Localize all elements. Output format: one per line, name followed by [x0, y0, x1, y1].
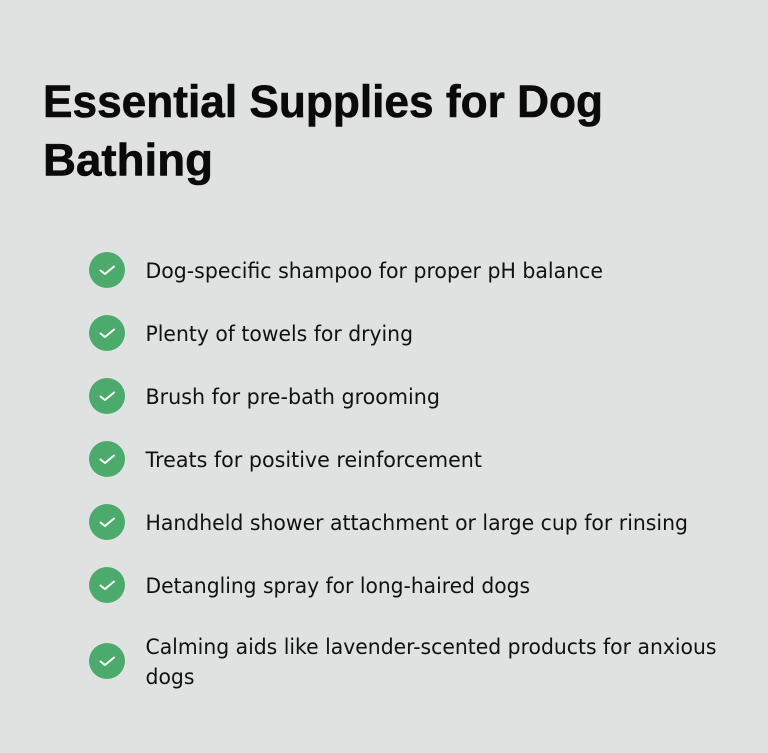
item: detangling spray: Detangling spray for long-haired dogs [146, 574, 530, 599]
title [43, 76, 603, 186]
item: brush [89, 378, 440, 414]
item: shampoo: Dog-specific shampoo for proper pH balance [146, 259, 603, 284]
checklist [89, 252, 716, 690]
item: towels [89, 315, 413, 351]
item: calming aids [89, 635, 716, 690]
item: detangling spray [89, 567, 530, 603]
title: Essential Supplies for Dog [43, 76, 603, 127]
item: shower attachment [89, 504, 688, 540]
item: shampoo [89, 252, 603, 288]
item: brush: Brush for pre-bath grooming [146, 385, 440, 410]
item: shower attachment: Handheld shower attachment or large cup for rinsing [146, 511, 688, 536]
title: Bathing [43, 134, 213, 186]
item: calming aids: dogs [146, 665, 194, 690]
item: calming aids: Calming aids like lavender-scented products for anxious [146, 635, 716, 660]
item: towels: Plenty of towels for drying [146, 322, 413, 347]
item: treats: Treats for positive reinforcement [145, 448, 482, 473]
item: treats [89, 441, 482, 477]
